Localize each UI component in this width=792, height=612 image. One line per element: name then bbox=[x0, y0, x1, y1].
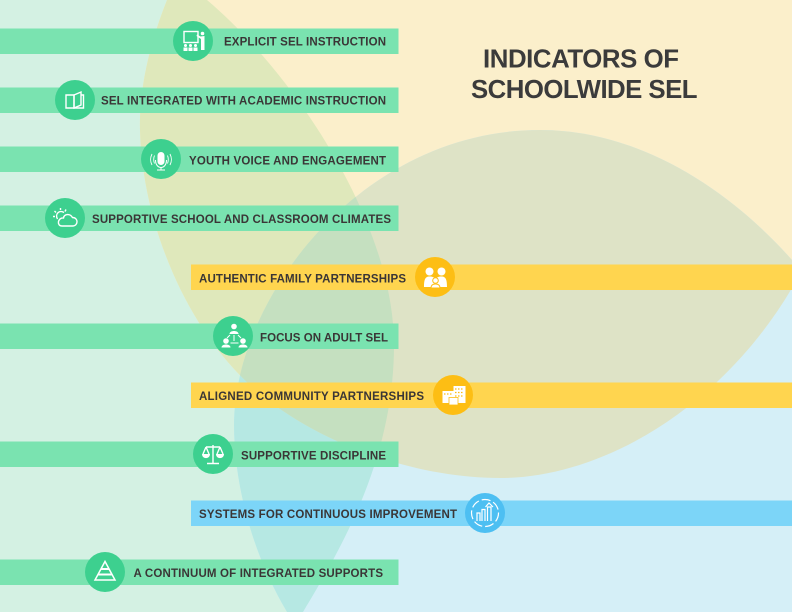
label: EXPLICIT SEL INSTRUCTION bbox=[224, 36, 386, 48]
indicator: explicit SEL instruction bbox=[0, 21, 398, 61]
label: YOUTH VOICE AND ENGAGEMENT bbox=[189, 156, 386, 168]
icon: scales bbox=[202, 445, 224, 464]
indicator: SEL integrated with academic instruction bbox=[0, 80, 398, 120]
title: SCHOOLWIDE SEL bbox=[471, 76, 698, 104]
icon: family bbox=[424, 268, 447, 288]
icon: open book bbox=[66, 92, 84, 108]
icon: connected adults bbox=[222, 324, 248, 348]
icon: buildings bbox=[442, 386, 466, 405]
indicator: supportive school and classroom climates bbox=[0, 198, 398, 238]
label: SUPPORTIVE SCHOOL AND CLASSROOM CLIMATES bbox=[92, 214, 391, 226]
title bbox=[471, 46, 698, 104]
icon: improvement cycle chart bbox=[472, 500, 498, 526]
icon: pyramid bbox=[95, 562, 115, 580]
indicator: youth voice and engagement bbox=[0, 139, 398, 179]
label: SYSTEMS FOR CONTINUOUS IMPROVEMENT bbox=[199, 509, 457, 521]
label: A CONTINUUM OF INTEGRATED SUPPORTS bbox=[134, 568, 383, 580]
indicator: supportive discipline bbox=[0, 434, 398, 474]
title: INDICATORS OF bbox=[483, 46, 679, 74]
label: ALIGNED COMMUNITY PARTNERSHIPS bbox=[199, 391, 424, 403]
label: SUPPORTIVE DISCIPLINE bbox=[241, 450, 386, 462]
label: AUTHENTIC FAMILY PARTNERSHIPS bbox=[199, 274, 406, 286]
label: FOCUS ON ADULT SEL bbox=[260, 332, 388, 344]
icon: teacher at board bbox=[184, 32, 204, 51]
indicator: authentic family partnerships bbox=[191, 257, 792, 297]
label: SEL INTEGRATED WITH ACADEMIC INSTRUCTION bbox=[101, 96, 386, 108]
indicator: focus on adult SEL bbox=[0, 316, 398, 356]
indicator: systems for continuous improvement bbox=[191, 493, 792, 533]
indicator: aligned community partnerships bbox=[191, 375, 792, 415]
icon: microphone bbox=[150, 152, 172, 170]
icon: sun and cloud bbox=[53, 208, 77, 226]
indicator: a continuum of integrated supports bbox=[0, 552, 398, 592]
